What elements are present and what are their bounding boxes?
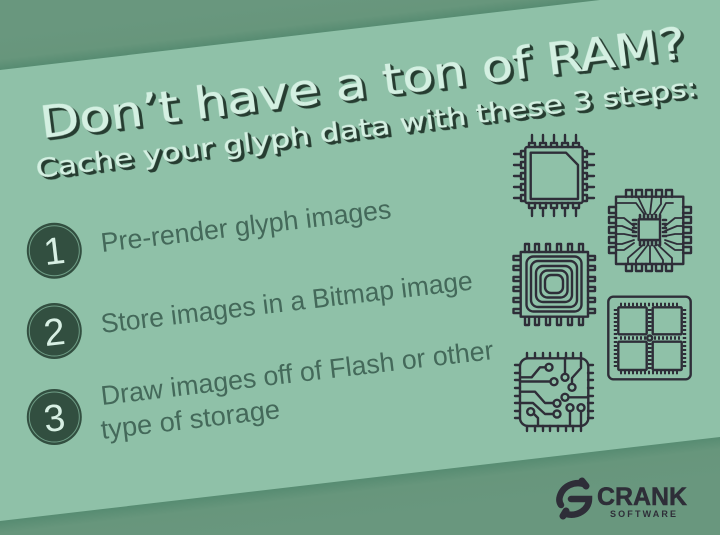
logo wordmark: CRANK [597,483,687,511]
bottom diagonal band [0,437,720,535]
icon: chip with concentric squares [514,244,595,325]
step 3 [27,335,495,445]
logo tagline: SOFTWARE [610,509,676,519]
icon: chip with traces [609,190,691,271]
step 1 badge [27,223,82,279]
step 2 text: Store images in a Bitmap image [99,266,474,339]
top diagonal band [0,0,600,70]
step 1 [27,194,393,279]
title: Don’t have a ton of RAM? [37,18,688,149]
step 2 badge [27,303,82,359]
step 3 text: type of storage [99,394,281,445]
icon: circuit board chip [515,353,593,431]
logo mark [559,481,589,516]
icon: chip with cut corner [514,135,594,216]
subtitle: Cache your glyph data with these 3 steps: [34,73,699,185]
step 1 text: Pre-render glyph images [99,194,393,258]
step 2 [27,266,474,359]
step 1 badge: 1 [41,230,67,274]
icon: four-core chip [608,297,691,379]
step 2 badge: 2 [42,311,67,355]
step 3 badge: 3 [42,397,67,441]
step 3 badge [27,389,82,445]
step 3 text [99,335,495,445]
step 3 text: Draw images off of Flash or other [99,335,495,411]
logo: Crank Software [559,481,687,519]
